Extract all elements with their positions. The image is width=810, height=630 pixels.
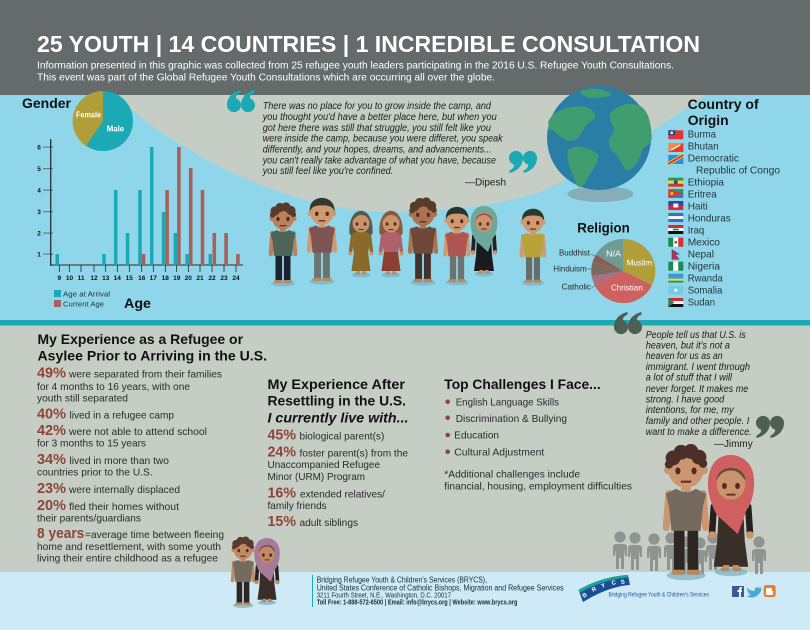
- religion pie chart: Muslim: [627, 258, 652, 268]
- country list: Eritrea: [688, 188, 717, 200]
- religion pie chart: N/A: [606, 249, 621, 259]
- country list: Somalia: [688, 284, 722, 296]
- age bar chart: 11: [78, 275, 85, 282]
- refugee experience statistics: 49%: [37, 366, 66, 382]
- intro text: This event was part of the Global Refugee Youth Consultations which are occurring all over the globe.: [37, 72, 495, 84]
- additional challenges note: *Additional challenges include: [444, 469, 580, 481]
- country list: Haiti: [688, 200, 708, 212]
- living situation statistics: Minor (URM) Program: [268, 471, 365, 483]
- age bar chart: 15: [126, 275, 133, 282]
- refugee experience statistics: for 4 months to 16 years, with one: [37, 381, 190, 393]
- refugee experience statistics: 8 years: [37, 526, 84, 542]
- challenges list: Discrimination & Bullying: [456, 413, 567, 425]
- living situation statistics: 16%: [268, 485, 296, 501]
- icon: twitter: [747, 587, 762, 598]
- country list: Rwanda: [688, 272, 723, 284]
- heading: after resettling: Resettling in the U.S.: [268, 393, 406, 409]
- silhouette crowd: [613, 531, 766, 575]
- heading: refugee experience: Asylee Prior to Arriving in the U.S.: [38, 348, 267, 364]
- age bar chart: 17: [150, 275, 157, 282]
- Dipesh quote: —Dipesh: [465, 178, 506, 189]
- Jimmy quote: —Jimmy: [714, 439, 753, 450]
- age bar chart: 2: [37, 230, 41, 238]
- Dipesh quote: got here there was still that struggle, you still felt like you: [263, 123, 491, 134]
- additional challenges note: [444, 469, 632, 493]
- country list: Mexico: [688, 236, 720, 248]
- Jimmy quote: People tell us that U.S. is: [646, 330, 746, 341]
- gender heading: Gender: [22, 95, 72, 111]
- age bar chart: 24: [232, 275, 240, 282]
- challenges list: [445, 397, 567, 459]
- country list: Democratic: [688, 152, 739, 164]
- religion pie chart: Buddhist: [559, 249, 591, 258]
- heading: after resettling: My Experience After: [268, 376, 406, 392]
- BRYCS logo: C: [611, 580, 617, 587]
- living situation statistics: extended relatives/: [300, 488, 385, 500]
- refugee experience statistics: lived in more than two: [70, 455, 169, 467]
- globe: [547, 86, 652, 202]
- gender pie chart: [73, 91, 133, 151]
- BRYCS logo: S: [621, 580, 625, 586]
- country list: Burma: [688, 128, 716, 140]
- Jimmy quote: strong. I have good: [646, 394, 725, 405]
- age bar chart: 18: [162, 275, 169, 282]
- Jimmy quote: heaven, but it's not a: [646, 340, 730, 351]
- footer contact block: Toll Free: 1-888-572-6500 | Email: info@brycs.org | Website: www.brycs.org: [317, 600, 517, 607]
- BRYCS logo: Bridging Refugee Youth & Children's Services: [608, 593, 709, 599]
- refugee experience statistics: 42%: [37, 423, 66, 439]
- intro text: Information presented in this graphic was collected from 25 refugee youth leaders participating in the 2016 U.S. Refugee Youth Consultations.: [37, 60, 674, 72]
- country list: Nigeria: [688, 260, 720, 272]
- age bar chart: 19: [173, 275, 181, 282]
- challenges list: Education: [454, 430, 499, 442]
- BRYCS logo: B: [582, 592, 589, 600]
- BRYCS logo: [578, 575, 709, 602]
- Jimmy quote: heaven for us as an: [646, 351, 723, 362]
- Dipesh quote: you can't really take advantage of what you have, because: [262, 155, 496, 166]
- refugee experience statistics: =average time between fleeing: [85, 529, 224, 541]
- living situation statistics: 15%: [268, 514, 296, 530]
- age bar chart: 10: [66, 275, 73, 282]
- age bar chart: 16: [138, 275, 146, 282]
- icon: facebook: [732, 586, 744, 597]
- youth characters row: [269, 197, 546, 286]
- footer contact block: 3211 Fourth Street, N.E., Washington, D.C. 20017: [317, 593, 451, 600]
- religion pie chart: [553, 239, 655, 303]
- age bar chart: 13: [102, 275, 110, 282]
- age bar chart: 5: [37, 166, 41, 173]
- icon: opening quote teal: [227, 90, 255, 112]
- challenges list: Cultural Adjustment: [454, 447, 544, 459]
- additional challenges note: financial, housing, employment difficulties: [444, 481, 632, 493]
- age bar chart: [37, 139, 243, 282]
- refugee experience statistics: home and resettlement, with some youth: [37, 541, 221, 553]
- refugee experience statistics: were separated from their families: [68, 369, 222, 381]
- refugee experience statistics: were internally displaced: [68, 484, 180, 496]
- Jimmy quote: [646, 330, 753, 450]
- refugee experience statistics: 40%: [37, 406, 66, 422]
- Dipesh quote: [262, 101, 506, 189]
- icon: blogger: [764, 585, 776, 597]
- country list: Ethiopia: [688, 176, 724, 188]
- religion heading: Religion: [577, 220, 630, 236]
- footer contact block: United States Conference of Catholic Bishops, Migration and Refugee Services: [317, 584, 564, 593]
- country list: Iraq: [688, 224, 704, 236]
- gender pie chart: Male: [107, 125, 125, 134]
- age bar chart: 14: [114, 275, 121, 282]
- icon: opening quote dark: [614, 312, 642, 334]
- heading: after resettling: I currently live with...: [268, 409, 408, 425]
- gender pie chart: Female: [76, 111, 101, 120]
- lower grey panel: [0, 325, 810, 572]
- small footer figures: [231, 536, 280, 608]
- refugee experience statistics: youth still separated: [37, 393, 128, 405]
- country of origin heading: Country of: [688, 96, 759, 112]
- Jimmy quote: a lot of stuff that I will: [646, 373, 733, 384]
- country list: Honduras: [688, 212, 731, 224]
- refugee experience statistics: 20%: [37, 498, 66, 514]
- country of origin heading: [688, 96, 759, 128]
- header band: [0, 0, 810, 95]
- age bar chart: 20: [185, 275, 192, 282]
- living situation statistics: adult siblings: [300, 517, 358, 529]
- footer contact block: Bridging Refugee Youth & Children's Services (BRYCS),: [317, 576, 487, 585]
- Jimmy quote: never forget. It makes me: [646, 384, 749, 395]
- heading: after resettling: [268, 376, 408, 425]
- age bar chart: 4: [37, 188, 41, 194]
- country of origin heading: Origin: [688, 112, 729, 128]
- living situation statistics: biological parent(s): [300, 431, 384, 443]
- refugee experience statistics: their parents/guardians: [37, 513, 141, 525]
- BRYCS logo: R: [591, 586, 598, 594]
- Dipesh quote: you still feel like you're confined.: [262, 166, 393, 177]
- chart legend: Age at Arrival: [63, 292, 110, 298]
- living situation statistics: Unaccompanied Refugee: [268, 459, 380, 471]
- religion pie chart: Catholic: [562, 283, 591, 292]
- religion pie chart: Hinduism: [553, 265, 587, 274]
- country list: Sudan: [688, 296, 715, 308]
- age bar chart: 21: [196, 275, 204, 282]
- living situation statistics: 45%: [268, 428, 296, 444]
- chart legend: [54, 290, 110, 308]
- teal divider band: [0, 320, 810, 326]
- age axis title: Age: [124, 295, 151, 311]
- Dipesh quote: you thought you'd have a better place here, but when you: [262, 112, 497, 123]
- living situation statistics: foster parent(s) from the: [300, 447, 408, 459]
- age bar chart: 3: [37, 209, 41, 216]
- living situation statistics: [268, 428, 408, 530]
- country list: Bhutan: [688, 140, 719, 152]
- refugee experience statistics: countries prior to the U.S.: [37, 467, 153, 479]
- challenges list: English Language Skills: [456, 397, 559, 409]
- icon: closing quote dark: [756, 416, 784, 438]
- refugee experience statistics: 23%: [37, 481, 66, 497]
- Dipesh quote: differently, and your hopes, dreams, and advancements...: [263, 144, 492, 155]
- large man and woman figures: [664, 444, 754, 580]
- age bar chart: 12: [90, 275, 98, 282]
- grey curved quote backdrop: [118, 95, 705, 212]
- BRYCS logo: Y: [601, 583, 606, 590]
- icon: closing quote teal: [509, 151, 537, 173]
- age bar chart: 22: [208, 275, 216, 282]
- refugee experience statistics: were not able to attend school: [68, 426, 207, 438]
- Dipesh quote: There was no place for you to grow inside the camp, and: [263, 101, 491, 112]
- intro text: [37, 60, 674, 84]
- country list: [688, 128, 780, 308]
- religion pie chart: Christian: [611, 283, 643, 293]
- age bar chart: 1: [37, 252, 41, 258]
- country flags: [668, 130, 683, 307]
- Jimmy quote: immigrant. I went through: [646, 362, 750, 373]
- country list: Nepal: [688, 248, 714, 260]
- living situation statistics: family friends: [268, 500, 327, 512]
- blue upper panel: [0, 95, 810, 320]
- heading: top challenges: Top Challenges I Face...: [444, 376, 601, 392]
- title: 25 YOUTH | 14 COUNTRIES | 1 INCREDIBLE CONSULTATION: [37, 31, 700, 57]
- Jimmy quote: family and other people. I: [646, 416, 749, 427]
- refugee experience statistics: living their entire childhood as a refugee: [37, 553, 218, 565]
- age bar chart: 6: [37, 144, 41, 152]
- age bar chart: 9: [57, 275, 61, 282]
- Jimmy quote: want to make a difference.: [646, 427, 752, 438]
- footer contact block: [312, 575, 564, 607]
- refugee experience statistics: lived in a refugee camp: [70, 409, 174, 421]
- age bar chart: 23: [220, 275, 228, 282]
- chart legend: Current Age: [63, 302, 104, 308]
- refugee experience statistics: for 3 months to 15 years: [37, 438, 146, 450]
- refugee experience statistics: 34%: [37, 452, 66, 468]
- living situation statistics: 24%: [268, 444, 296, 460]
- heading: refugee experience: [38, 331, 267, 364]
- Jimmy quote: intentions, for me, my: [646, 405, 735, 416]
- Dipesh quote: were inside the camp, because you were differet, you speak: [263, 134, 504, 144]
- refugee experience statistics: fled their homes without: [69, 501, 179, 513]
- refugee experience statistics: [37, 366, 224, 565]
- footer band: [0, 572, 810, 630]
- country list: Republic of Congo: [696, 164, 780, 176]
- heading: refugee experience: My Experience as a Refugee or: [38, 331, 244, 347]
